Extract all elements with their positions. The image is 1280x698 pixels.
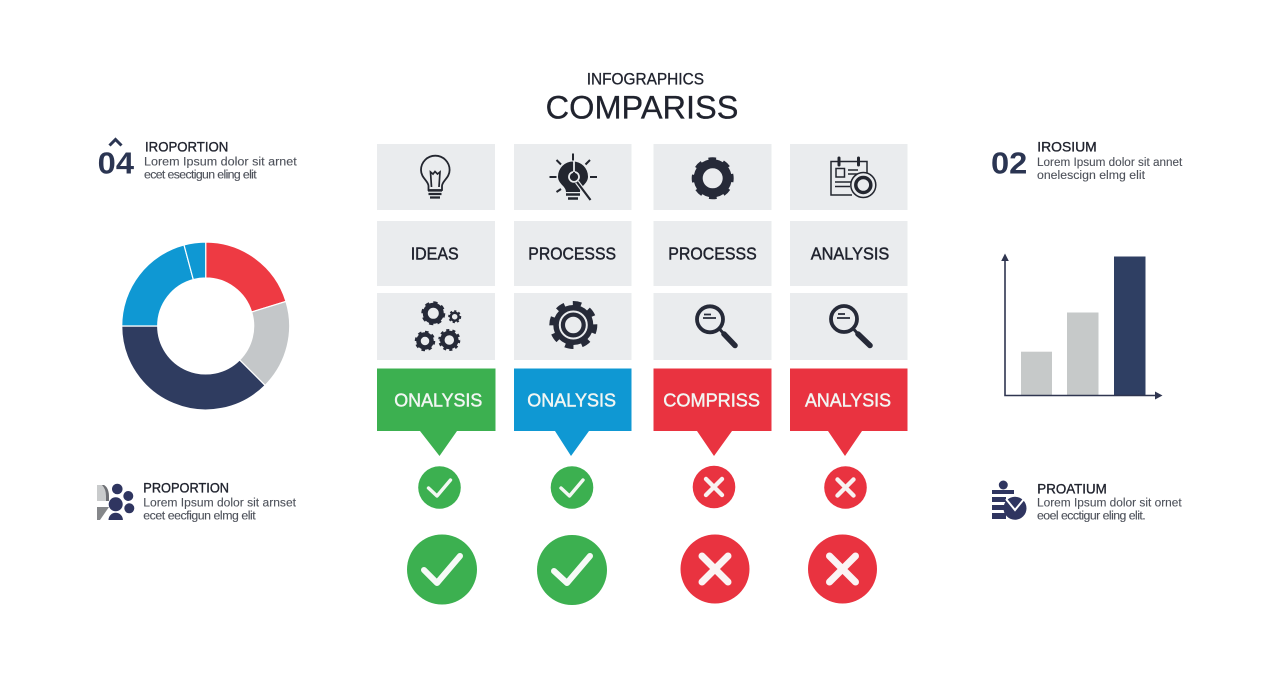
icon: small check bbox=[551, 466, 593, 509]
panel: top left note 04: 04 bbox=[98, 145, 135, 180]
panel: bottom left note: PROPORTION bbox=[143, 480, 229, 496]
callout: red analysis: ANALYSIS bbox=[805, 389, 891, 410]
icon: person with pie bbox=[992, 480, 1026, 520]
bar: small gray bbox=[1021, 352, 1052, 395]
segment: gray bbox=[240, 301, 290, 385]
label cell: ideas: IDEAS bbox=[411, 243, 459, 263]
panel: top left note 04: IROPORTION bbox=[145, 139, 228, 155]
panel: comparison column 4 bbox=[790, 144, 908, 604]
icon cell: gear bbox=[654, 144, 772, 210]
callout: green onalysis bbox=[377, 368, 496, 456]
bar: medium gray bbox=[1067, 312, 1098, 395]
icon cell: calendar report bbox=[790, 144, 908, 210]
label cell: processs: PROCESSS bbox=[668, 243, 757, 263]
icon: large check bbox=[407, 534, 477, 604]
segment: red bbox=[206, 242, 286, 312]
icon: small cross bbox=[693, 466, 735, 508]
bar: tall navy bbox=[1114, 256, 1146, 395]
title bbox=[546, 70, 738, 125]
callout: red compriss bbox=[654, 368, 772, 456]
icon cell: magnifier bbox=[654, 293, 772, 360]
segment: blue bbox=[122, 245, 193, 326]
panel: comparison column 2 bbox=[514, 144, 632, 605]
icon cell: ring gear bbox=[514, 293, 632, 360]
panel: comparison column 3 bbox=[654, 144, 772, 604]
label cell: analysis: ANALYSIS bbox=[811, 243, 889, 263]
panel: bottom right note: eoel ecctigur eling elit. bbox=[1037, 509, 1146, 523]
panel: top right note 02: Lorem Ipsum dolor sit annet bbox=[1037, 155, 1183, 169]
panel: top right note 02: IROSIUM bbox=[1037, 139, 1097, 155]
icon cell: light bulb bbox=[377, 144, 495, 210]
panel: bottom left note: Lorem Ipsum dolor sit arnset bbox=[143, 496, 297, 510]
label cell: analysis bbox=[790, 221, 908, 286]
title: COMPARISS bbox=[546, 89, 738, 125]
panel: top left note 04 bbox=[98, 139, 297, 181]
label cell: ideas bbox=[377, 221, 495, 286]
panel: bottom left note bbox=[97, 480, 297, 522]
icon: large cross bbox=[808, 534, 877, 604]
icon cell: bulb with rays bbox=[514, 144, 632, 210]
panel: top left note 04: ecet esectigun eling elit bbox=[144, 167, 257, 181]
callout: blue onalysis: ONALYSIS bbox=[527, 389, 616, 410]
callout: blue onalysis bbox=[514, 368, 632, 456]
label cell: processs bbox=[514, 221, 632, 286]
icon: small cross bbox=[824, 466, 867, 509]
icon cell: magnifier bbox=[790, 293, 908, 360]
panel: bottom right note: PROATIUM bbox=[1037, 480, 1107, 496]
callout: red analysis bbox=[790, 368, 908, 456]
donut chart bbox=[122, 242, 290, 410]
panel: bottom right note bbox=[992, 480, 1182, 523]
icon: large cross bbox=[680, 534, 750, 604]
panel: top right note 02 bbox=[991, 139, 1183, 182]
callout: red compriss: COMPRISS bbox=[663, 389, 760, 410]
icon cell: four gears bbox=[377, 293, 495, 360]
icon: people group bbox=[97, 484, 134, 520]
panel: bottom left note: ecet eecfigun elmg elit bbox=[143, 508, 256, 522]
panel: comparison column 1 bbox=[377, 144, 496, 604]
segment: navy bbox=[122, 326, 265, 410]
icon: caret above number bbox=[110, 140, 122, 146]
panel: top right note 02: 02 bbox=[991, 145, 1027, 180]
panel: top right note 02: onelescign elmg elit bbox=[1037, 168, 1146, 182]
label cell: processs: PROCESSS bbox=[528, 243, 616, 263]
title: INFOGRAPHICS bbox=[587, 70, 704, 88]
label cell: processs bbox=[654, 221, 772, 286]
axes with arrows bbox=[1001, 254, 1162, 400]
callout: green onalysis: ONALYSIS bbox=[394, 389, 482, 410]
panel: top left note 04: Lorem Ipsum dolor sit arnet bbox=[144, 155, 297, 169]
segment: small blue bbox=[184, 242, 206, 280]
panel: bottom right note: Lorem Ipsum dolor sit ornet bbox=[1037, 496, 1182, 510]
icon: large check bbox=[537, 535, 607, 605]
icon: small check bbox=[418, 466, 461, 509]
bar chart bbox=[1001, 254, 1162, 400]
